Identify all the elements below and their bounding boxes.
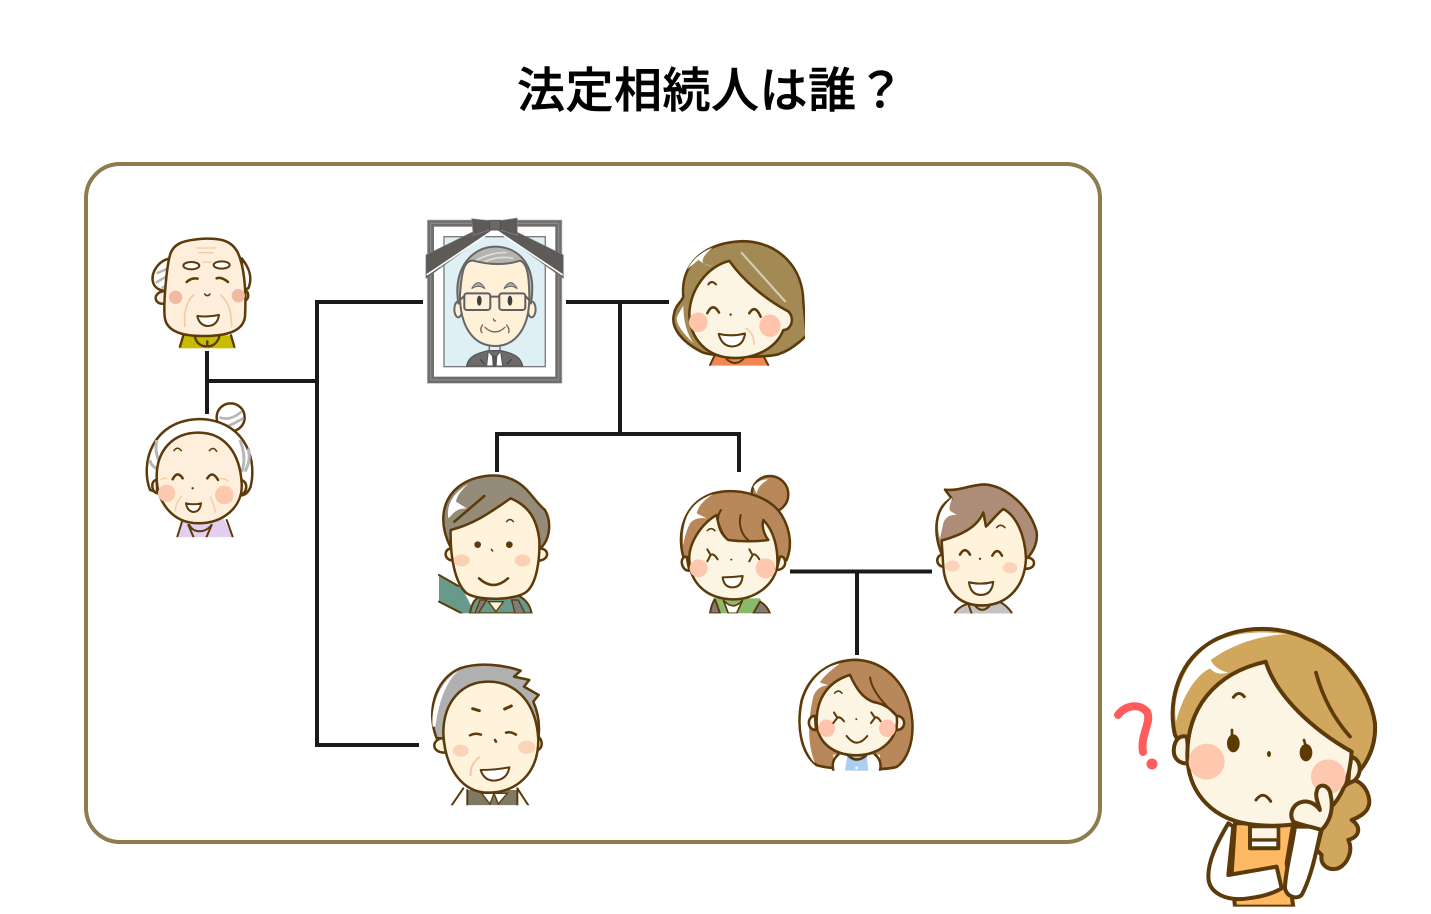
face [1187, 662, 1352, 826]
ponytail [1317, 780, 1369, 869]
family tree connector lines [207, 302, 932, 745]
icon: wife [673, 241, 807, 366]
mourning ribbon [426, 218, 563, 278]
title: 法定相続人は誰？ [517, 65, 905, 118]
icon: thinking woman [1173, 629, 1375, 907]
icon: daughter's husband [936, 484, 1037, 614]
panel: family tree frame [86, 164, 1100, 842]
hand [1291, 786, 1332, 830]
icon: grandchild [800, 660, 913, 771]
hair [1173, 629, 1375, 780]
icon: son [439, 476, 549, 613]
ears [1174, 736, 1190, 763]
icon: deceased's brother [432, 665, 542, 805]
apron and blouse [1232, 823, 1293, 907]
icon: grandmother [147, 403, 252, 537]
icon: daughter [681, 476, 790, 613]
icon: question mark [1118, 706, 1158, 770]
icon: deceased portrait in mourning frame [426, 218, 563, 383]
icon: grandfather [153, 239, 250, 348]
